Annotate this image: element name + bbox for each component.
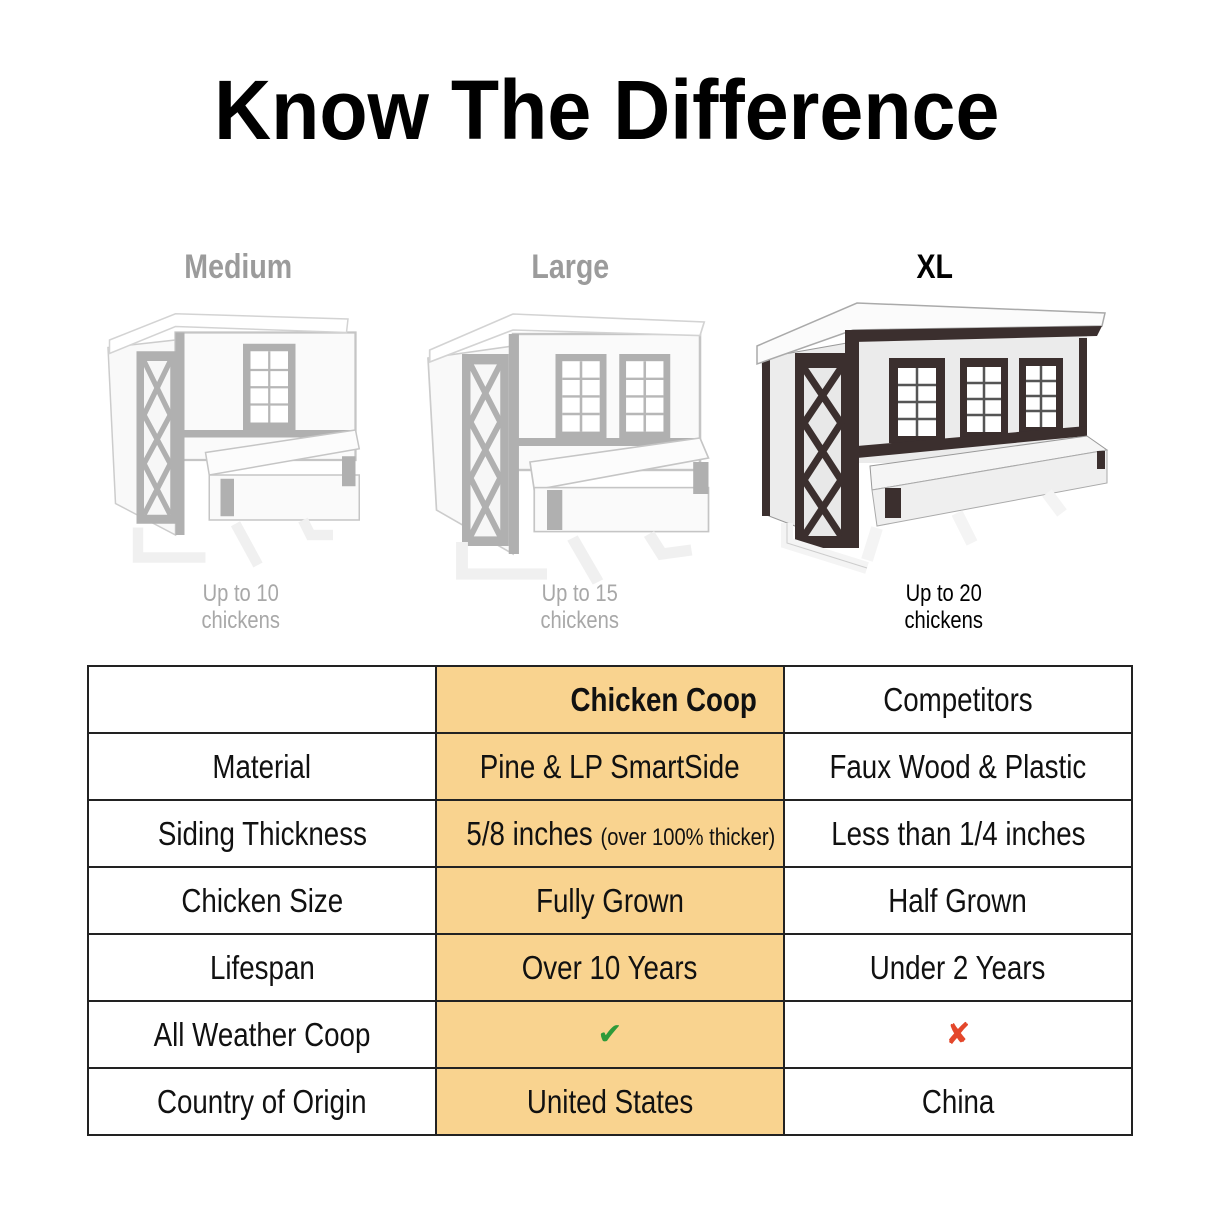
comparison table: Less than 1/4 inches: [831, 814, 1085, 852]
comparison table: Material: [213, 748, 311, 784]
comparison table: Fully Grown: [536, 882, 684, 918]
comparison table: Lifespan: [210, 948, 314, 986]
caption: large: Up to 15: [542, 580, 618, 607]
comparison table: ✘: [945, 1018, 971, 1051]
caption: XL: [905, 580, 983, 634]
coop: large: [428, 314, 708, 582]
caption: medium: Up to 10: [203, 580, 279, 607]
comparison table: United States: [527, 1082, 693, 1120]
comparison table: 5/8 inches (over 100% thicker): [466, 814, 775, 852]
comparison table: Country of Origin: [157, 1082, 367, 1120]
comparison table: China: [922, 1082, 994, 1120]
comparison table: Under 2 Years: [870, 948, 1046, 986]
title: Know The Difference: [214, 63, 1000, 157]
comparison table: Over 10 Years: [522, 948, 698, 986]
comparison table: Competitors: [883, 680, 1033, 718]
caption: large: chickens: [541, 607, 619, 634]
caption: XL: chickens: [905, 607, 983, 634]
caption: large: [541, 580, 619, 634]
coop: medium: [108, 314, 359, 565]
comparison table: Faux Wood & Plastic: [830, 748, 1086, 784]
coop images: [107, 302, 1108, 584]
caption: medium: chickens: [202, 607, 280, 634]
label: Medium: Medium: [184, 248, 292, 286]
label: XL: XL: [917, 248, 953, 286]
comparison table: ✔: [597, 1018, 623, 1051]
comparison table: All Weather Coop: [154, 1016, 370, 1052]
comparison table: [87, 665, 1133, 1136]
comparison table: Chicken Size: [181, 882, 343, 918]
comparison table: Siding Thickness: [157, 814, 367, 852]
caption: medium: [202, 580, 280, 634]
comparison table: Chicken Coop: [571, 680, 757, 718]
coop: XL: [757, 303, 1107, 568]
label: Large: Large: [531, 248, 609, 286]
comparison table: Pine & LP SmartSide: [480, 748, 740, 784]
caption: XL: Up to 20: [906, 580, 982, 607]
comparison table: Half Grown: [889, 882, 1027, 918]
